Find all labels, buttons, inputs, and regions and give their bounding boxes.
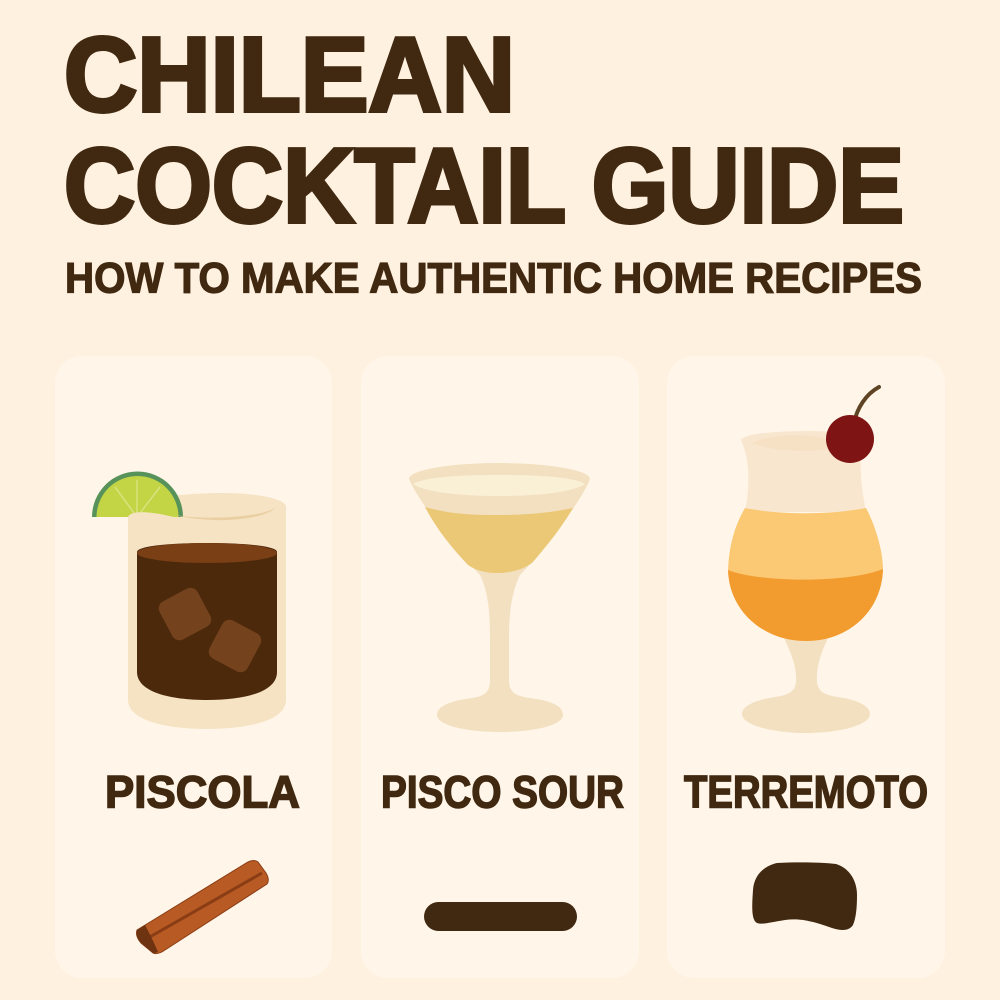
subtitle: HOW TO MAKE AUTHENTIC HOME RECIPES (65, 254, 922, 302)
label: terremoto: TERREMOTO (684, 766, 928, 818)
icon: piscola glass (92, 472, 286, 729)
icon: cinnamon stick (136, 860, 268, 954)
title: COCKTAIL GUIDE (64, 127, 904, 245)
panel: terremoto (667, 356, 945, 978)
ice cube 1 (156, 585, 214, 643)
icon: dark bar (424, 902, 577, 931)
glass stem and foot (742, 638, 870, 733)
title: CHILEAN (64, 16, 515, 134)
liquid (137, 543, 277, 700)
ice cube 2 (206, 617, 264, 675)
panel: piscola (55, 356, 332, 978)
upper layer (728, 508, 883, 582)
panel: pisco sour (361, 356, 639, 978)
icon: dark blob (752, 862, 857, 930)
title (64, 16, 904, 245)
icon: lime wedge (92, 472, 183, 517)
label: pisco sour: PISCO SOUR (381, 766, 624, 818)
label: piscola: PISCOLA (105, 766, 300, 818)
icon: martini glass (409, 463, 590, 732)
icon: cherry (826, 387, 879, 463)
liquid (425, 507, 573, 573)
icon: terremoto glass (728, 387, 883, 733)
lower layer (728, 569, 883, 641)
